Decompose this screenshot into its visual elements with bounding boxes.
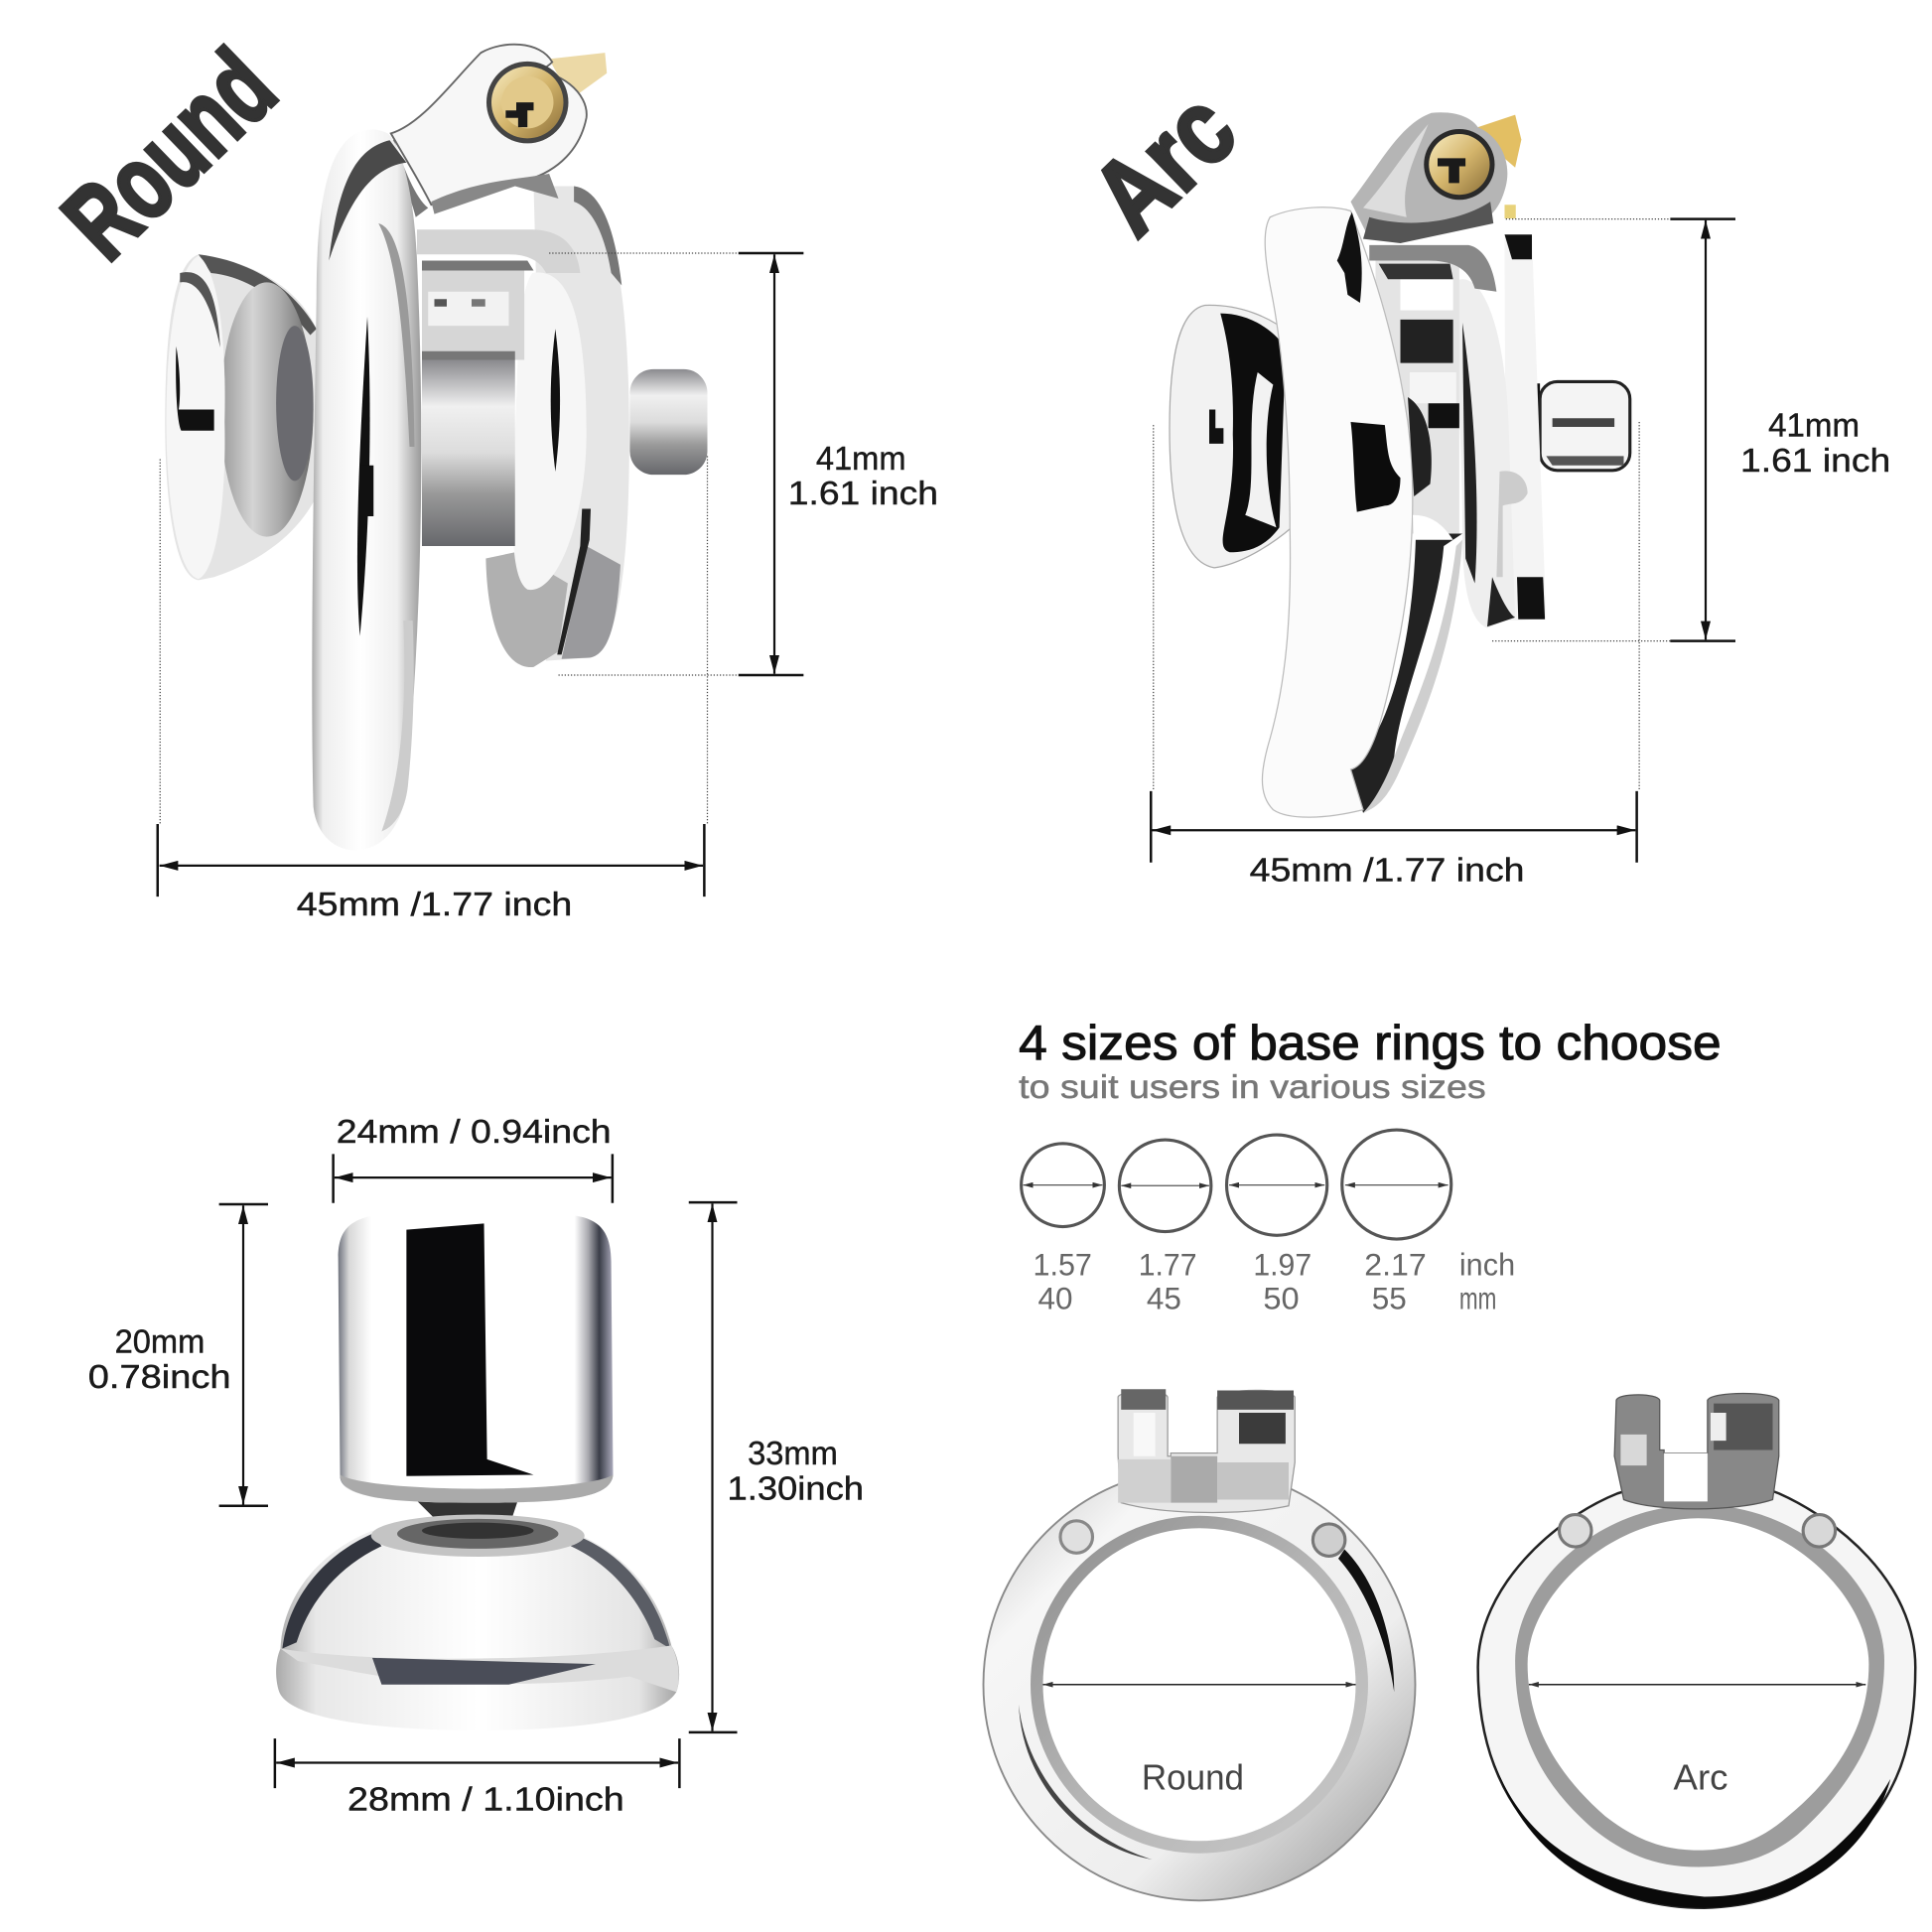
- dimension: width 45mm: [158, 456, 707, 923]
- label: Arc ring: Arc: [1674, 1756, 1727, 1797]
- size table: inch and mm: mm: [1459, 1282, 1496, 1316]
- size table: inch and mm: 2.17: [1364, 1247, 1427, 1282]
- dimension: 24mm width: 24mm / 0.94inch: [337, 1113, 612, 1151]
- icon: central cylinder: [417, 229, 580, 546]
- dimension: 28mm width: 28mm / 1.10inch: [347, 1781, 624, 1819]
- icon: dome base: [276, 1499, 679, 1730]
- dimension: height 41mm: [1492, 219, 1890, 641]
- dimension: height 41mm: 1.61 inch: [1740, 442, 1890, 480]
- dimension: width 45mm: [1151, 422, 1639, 890]
- panel: knob detail dimensions: [88, 1113, 864, 1819]
- panel: base ring sizes: [983, 1017, 1915, 1908]
- icon: arc base ring: [1478, 1393, 1915, 1908]
- dimension: 20mm height: 0.78inch: [88, 1358, 230, 1396]
- dimension arrow: arc ring: [1529, 1684, 1865, 1686]
- dimension: height 41mm: [549, 253, 938, 675]
- size table: inch and mm: 1.57: [1033, 1247, 1092, 1282]
- label: Arc: Arc: [1069, 69, 1258, 257]
- icon: main curved arc: [1262, 207, 1462, 817]
- dimension: width 45mm: 45mm /1.77 inch: [297, 886, 572, 923]
- size table: inch and mm: 1.77: [1139, 1247, 1197, 1282]
- dimension: width 45mm: 45mm /1.77 inch: [1250, 852, 1525, 889]
- size table: inch and mm: 50: [1263, 1282, 1300, 1316]
- icon: lock hasp and brass cylinder: [385, 45, 607, 217]
- dimension: height 41mm: 41mm: [1768, 406, 1860, 444]
- dimension: 33mm height: 1.30inch: [727, 1469, 864, 1507]
- icon: rear ring and pin: [1449, 234, 1630, 627]
- dimension: 20mm height: [88, 1204, 268, 1506]
- dimension: height 41mm: 1.61 inch: [788, 475, 938, 512]
- icon: main curved ring: [312, 130, 421, 850]
- size table: inch and mm: 40: [1038, 1282, 1072, 1316]
- icon: cylinder top: [339, 1208, 614, 1503]
- size table: inch and mm: 55: [1372, 1282, 1407, 1316]
- icon: rear ring and pin: [485, 186, 707, 667]
- icon: knob on left: [165, 254, 317, 580]
- dimension: 33mm height: 33mm: [748, 1435, 838, 1472]
- dimension: 20mm height: 20mm: [115, 1322, 205, 1360]
- panel: arc device side view: [1069, 69, 1890, 889]
- dimension: height 41mm: 41mm: [816, 440, 905, 478]
- dimension: 33mm height: [689, 1202, 864, 1732]
- subheading: to suit users in various sizes: [1019, 1068, 1486, 1106]
- size table: inch and mm: 1.97: [1253, 1247, 1311, 1282]
- dimension: 28mm width: [275, 1738, 679, 1819]
- size table: inch and mm: inch: [1459, 1247, 1515, 1282]
- size table: inch and mm: [1033, 1247, 1515, 1316]
- dimension arrow: round ring: [1042, 1684, 1356, 1686]
- panel: round device side view: [41, 28, 938, 923]
- label: Round ring: Round: [1142, 1756, 1244, 1797]
- heading: 4 sizes of base rings to choose: [1019, 1017, 1722, 1070]
- size diagram: four circles: [1022, 1130, 1451, 1239]
- dimension: 24mm width: [334, 1113, 613, 1203]
- icon: round base ring: [983, 1389, 1416, 1900]
- icon: knob on left: [1170, 305, 1292, 568]
- icon: central cylinder: [1369, 245, 1496, 534]
- size table: inch and mm: 45: [1147, 1282, 1181, 1316]
- icon: lock body and brass cylinder: [1350, 112, 1521, 243]
